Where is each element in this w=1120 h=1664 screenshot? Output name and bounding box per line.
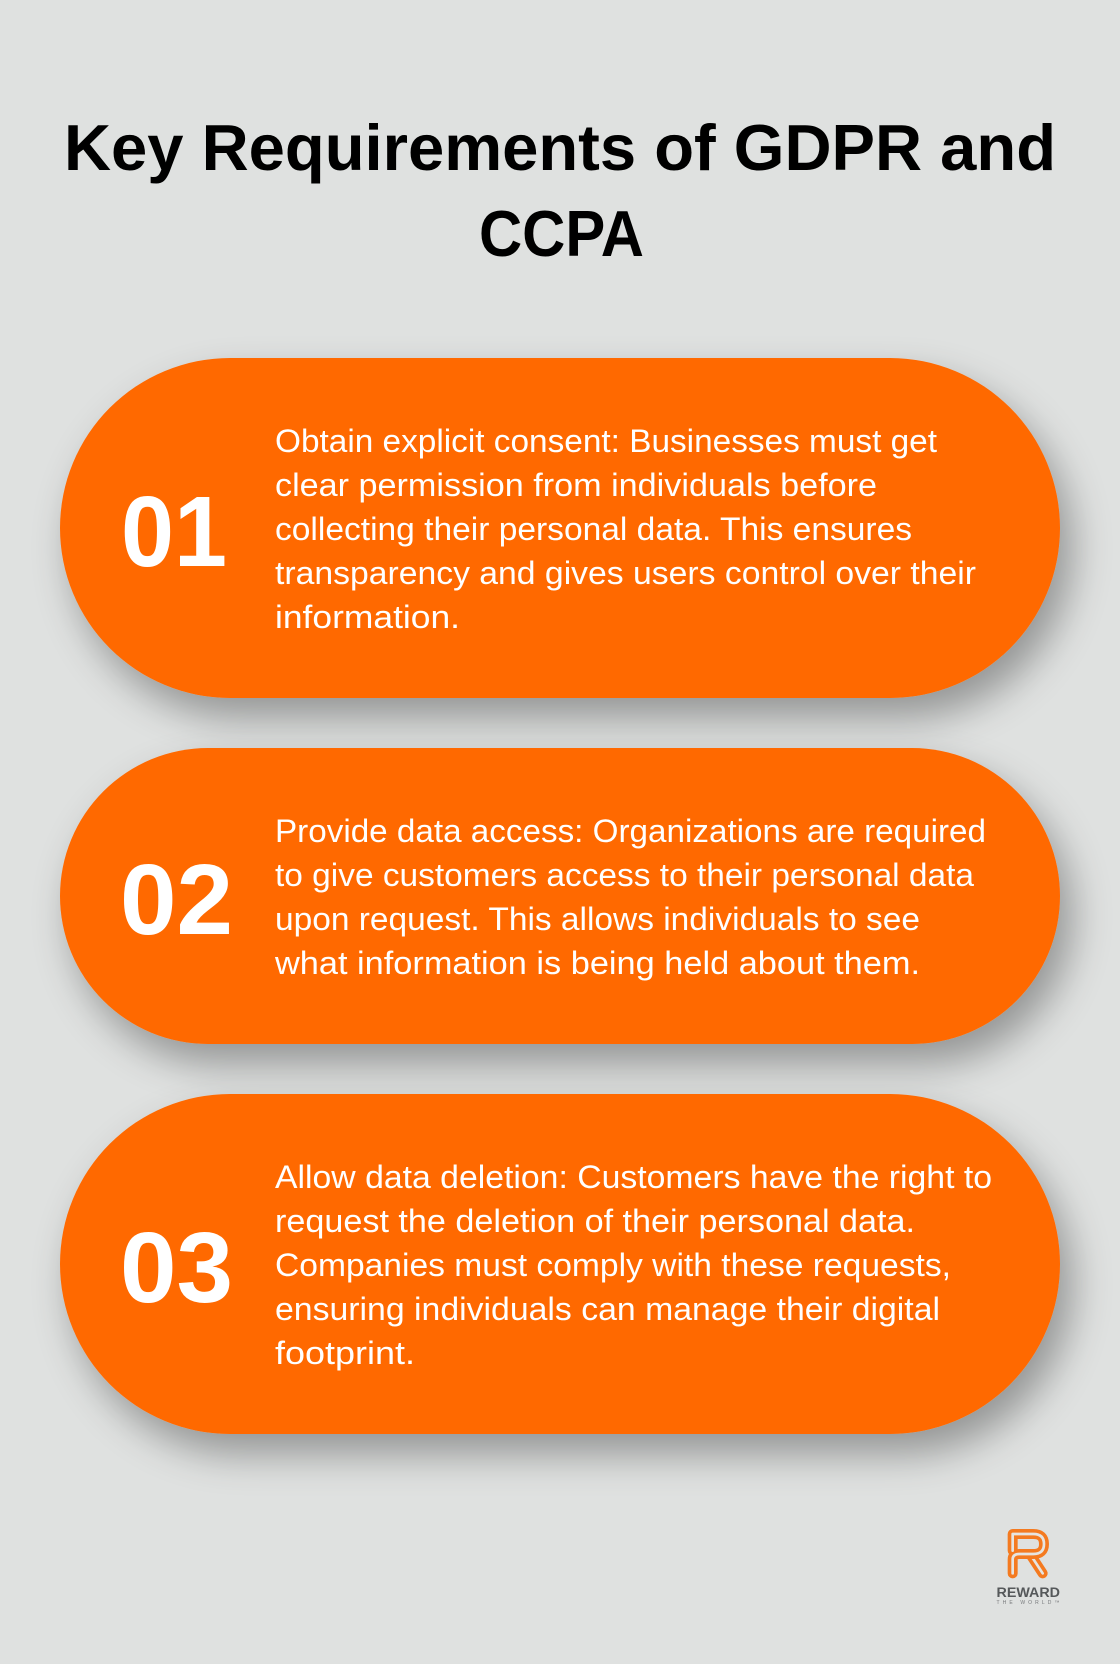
- title: [64, 111, 1056, 270]
- text block 02: Provide data access: Organizations are required: [275, 813, 986, 849]
- pill background 01: [60, 358, 1060, 698]
- panel: step 01: [60, 358, 1060, 698]
- text block 03: Allow data deletion: Customers have the right to: [275, 1159, 992, 1195]
- text block 01: Obtain explicit consent: Businesses must get: [275, 423, 937, 459]
- title: CCPA: [479, 197, 644, 270]
- text block 02: to give customers access to their personal data: [275, 857, 974, 893]
- text block 02: upon request. This allows individuals to see: [275, 901, 920, 937]
- text block 01: collecting their personal data. This ensures: [275, 511, 912, 547]
- panel: step 02: [60, 748, 1060, 1044]
- text block 03: [275, 1159, 992, 1371]
- text block 03: request the deletion of their personal data.: [275, 1203, 915, 1239]
- text block 03: Companies must comply with these requests,: [275, 1247, 951, 1283]
- logo: Reward the World: [996, 1534, 1060, 1606]
- wordmark: REWARD: [996, 1585, 1060, 1600]
- pill background 03: [60, 1094, 1060, 1434]
- text block 03: footprint.: [275, 1335, 415, 1371]
- text block 02: what information is being held about them.: [274, 945, 920, 981]
- text block 03: ensuring individuals can manage their digital: [275, 1291, 940, 1327]
- panel: step 03: [60, 1094, 1060, 1434]
- text block 01: information.: [275, 599, 460, 635]
- number 02: 02: [120, 844, 233, 956]
- text block 01: transparency and gives users control over their: [275, 555, 976, 591]
- text block 01: [275, 423, 976, 635]
- number 03: 03: [120, 1212, 233, 1324]
- text block 02: [274, 813, 986, 981]
- tagline: THE WORLD™: [996, 1600, 1060, 1606]
- pill background 02: [60, 748, 1060, 1044]
- title: Key Requirements of GDPR and: [64, 111, 1056, 184]
- number 01: 01: [121, 476, 227, 588]
- text block 01: clear permission from individuals before: [275, 467, 877, 503]
- icon: R mark: [1013, 1534, 1044, 1573]
